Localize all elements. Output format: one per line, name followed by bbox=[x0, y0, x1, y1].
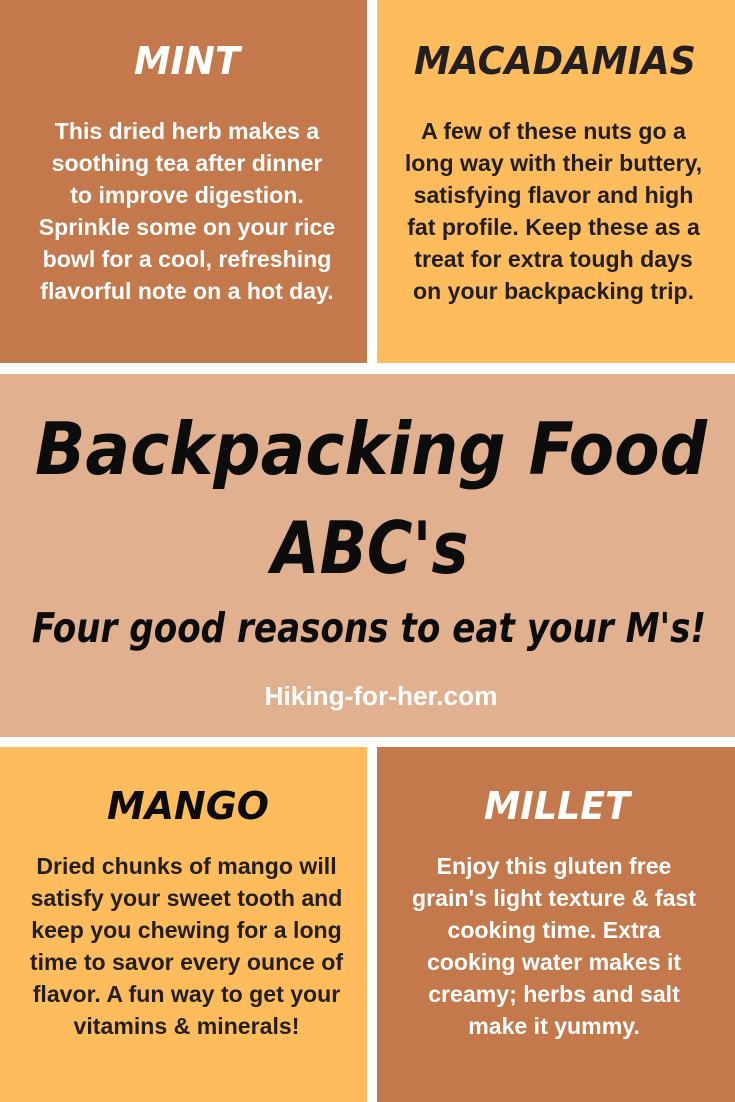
text: mango description: time to savor every ounce of bbox=[30, 949, 343, 975]
panel: millet bbox=[377, 747, 735, 1102]
text: mint description: soothing tea after dinner bbox=[52, 150, 322, 176]
text: mango description: Dried chunks of mango will bbox=[36, 853, 337, 879]
website: Hiking-for-her.com bbox=[265, 681, 497, 711]
text: millet description bbox=[412, 853, 696, 1039]
text: millet description: Enjoy this gluten free bbox=[437, 853, 671, 879]
text: macadamias description: on your backpacking trip. bbox=[413, 278, 694, 304]
heading: mango: MANGO bbox=[107, 784, 269, 828]
text: mango description: keep you chewing for a long bbox=[31, 917, 342, 943]
text: macadamias description bbox=[405, 118, 702, 304]
text: millet description: cooking water makes it bbox=[427, 949, 681, 975]
text: mango description: flavor. A fun way to get your bbox=[33, 981, 340, 1007]
heading: mint: MINT bbox=[134, 39, 243, 83]
panel: title bbox=[0, 374, 735, 737]
text: millet description: creamy; herbs and salt bbox=[428, 981, 680, 1007]
text: mint description: This dried herb makes a bbox=[55, 118, 319, 144]
title bbox=[35, 407, 708, 590]
text: millet description: grain's light texture & fast bbox=[412, 885, 696, 911]
text: macadamias description: fat profile. Keep these as a bbox=[407, 214, 700, 240]
text: mint description bbox=[39, 118, 335, 304]
text: macadamias description: A few of these nuts go a bbox=[421, 118, 686, 144]
text: millet description: cooking time. Extra bbox=[447, 917, 661, 943]
text: macadamias description: treat for extra tough days bbox=[414, 246, 693, 272]
text: mint description: bowl for a cool, refreshing bbox=[43, 246, 331, 272]
text: mint description: Sprinkle some on your rice bbox=[39, 214, 335, 240]
heading: macadamias: MACADAMIAS bbox=[414, 39, 696, 83]
text: macadamias description: satisfying flavor and high bbox=[414, 182, 693, 208]
panel: mango bbox=[0, 747, 367, 1102]
text: mint description: to improve digestion. bbox=[70, 182, 304, 208]
text: mint description: flavorful note on a hot day. bbox=[40, 278, 334, 304]
panel: mint bbox=[0, 0, 367, 363]
text: mango description bbox=[30, 853, 344, 1039]
heading: millet: MILLET bbox=[484, 784, 633, 828]
text: mango description: vitamins & minerals! bbox=[74, 1013, 299, 1039]
text: macadamias description: long way with their buttery, bbox=[405, 150, 702, 176]
text: millet description: make it yummy. bbox=[468, 1013, 640, 1039]
text: mango description: satisfy your sweet tooth and bbox=[31, 885, 342, 911]
title: ABC's bbox=[267, 506, 468, 590]
panel: macadamias bbox=[377, 0, 735, 363]
